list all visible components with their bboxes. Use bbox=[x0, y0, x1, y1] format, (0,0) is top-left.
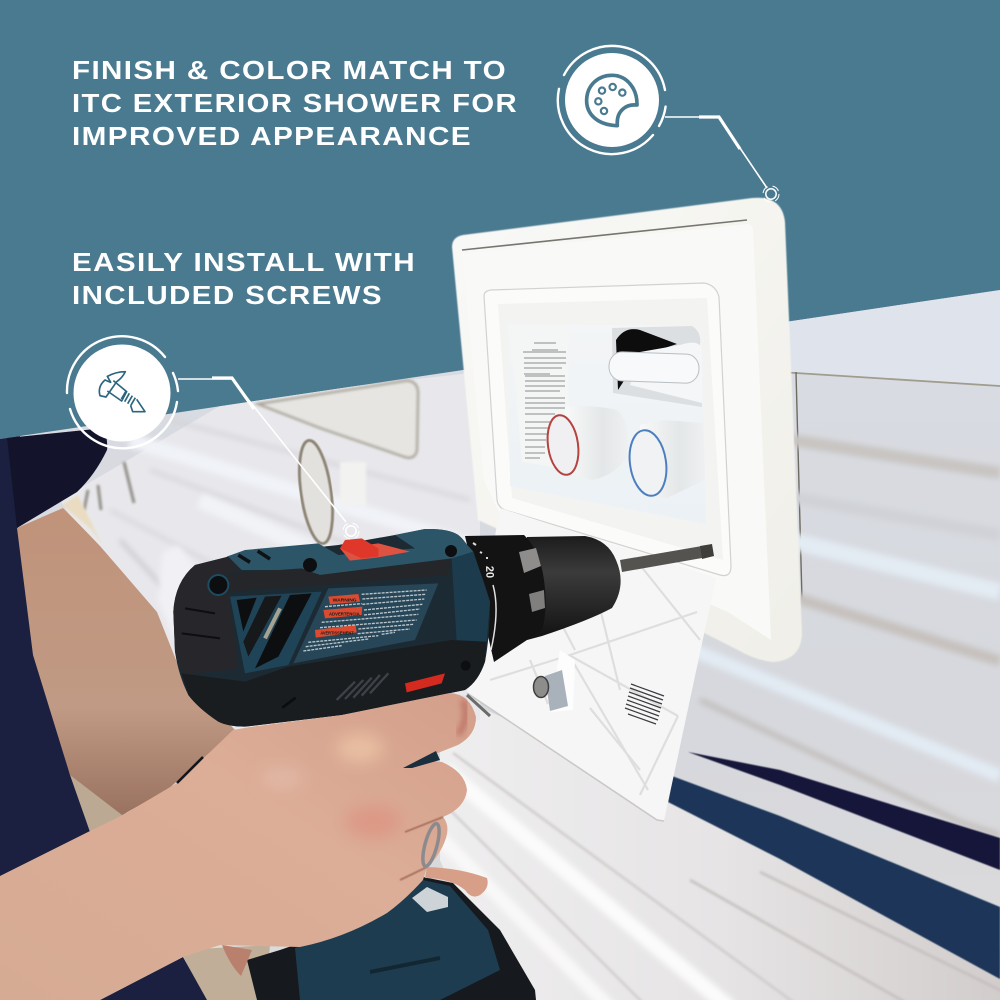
upper dark rubber bbox=[208, 558, 452, 592]
top teal housing bbox=[227, 529, 473, 575]
shirt body bbox=[0, 436, 90, 877]
warning label: WARNING bbox=[333, 598, 357, 604]
main housing bbox=[173, 529, 490, 727]
red trigger tag bbox=[405, 673, 445, 692]
ground bbox=[70, 774, 127, 832]
water pipe bbox=[630, 343, 702, 403]
heading: finish and color match: FINISH & COLOR MATCH TO bbox=[72, 57, 507, 85]
drill body bbox=[173, 529, 490, 727]
bolt and nut bbox=[534, 650, 575, 712]
door label bbox=[625, 684, 664, 724]
heading: easily install: EASILY INSTALL WITH bbox=[72, 249, 416, 277]
photo: trailer wall and person's arm bbox=[0, 280, 1000, 1000]
little finger bbox=[425, 867, 488, 897]
icon: palette badge bbox=[558, 46, 666, 154]
side teal housing bbox=[452, 552, 490, 668]
heading: easily install: INCLUDED SCREWS bbox=[72, 282, 383, 310]
blurred oval on wall bbox=[297, 438, 335, 546]
outer frame bbox=[452, 198, 802, 662]
heading: finish and color match: ITC EXTERIOR SHOWER FOR bbox=[72, 90, 518, 118]
drill bbox=[173, 529, 621, 727]
callout: screws bbox=[67, 249, 416, 539]
warm wall edge by sleeve bbox=[62, 494, 100, 541]
red forward button bbox=[340, 538, 410, 561]
vent grille bbox=[230, 592, 322, 673]
warning label: ADVERTENCIA bbox=[329, 612, 360, 618]
warning label bbox=[293, 583, 438, 663]
forearm and fingers bbox=[0, 693, 476, 1000]
lever handle bbox=[609, 351, 699, 384]
grip vents bbox=[337, 673, 388, 700]
lower wall area bbox=[440, 690, 1000, 1000]
connector line to drill bbox=[178, 378, 359, 539]
white post by drill bbox=[158, 546, 190, 625]
blurred wall bracket bbox=[84, 462, 134, 510]
ground lower bbox=[180, 945, 270, 1000]
blurred hatch on wall bbox=[258, 381, 418, 458]
shirt sleeve bbox=[7, 428, 107, 528]
heading: easily install bbox=[72, 249, 416, 310]
upper recess with hole bbox=[612, 326, 702, 407]
heading: finish and color match bbox=[72, 57, 518, 151]
thick blue trailer stripe bbox=[668, 776, 1000, 979]
collar bbox=[465, 535, 546, 662]
thin navy trailer stripe bbox=[688, 752, 1000, 870]
hot knob bbox=[544, 406, 628, 480]
hand and forearm bbox=[0, 693, 488, 1000]
chuck bbox=[527, 536, 621, 640]
warning label: AVERTISSEMENT bbox=[320, 630, 354, 635]
wrist band bbox=[177, 757, 203, 783]
lid face bbox=[462, 224, 771, 640]
icon: screw badge bbox=[67, 336, 178, 448]
top slots bbox=[238, 551, 270, 562]
heading: finish and color match: IMPROVED APPEARANCE bbox=[72, 123, 472, 151]
finger creases bbox=[400, 817, 443, 880]
shower panel bbox=[452, 198, 802, 821]
instructions placard bbox=[509, 325, 570, 470]
upper arm bbox=[17, 508, 235, 815]
left rubber bbox=[173, 557, 242, 675]
recess interior bbox=[498, 298, 723, 560]
door open below panel bbox=[467, 508, 716, 821]
lower wall siding bands bbox=[447, 753, 1000, 1000]
callout: color match bbox=[72, 46, 779, 202]
lower black grip bbox=[182, 640, 487, 727]
torque number: 20 bbox=[483, 566, 495, 578]
recess frame bbox=[484, 283, 731, 576]
siding: left side, blurred bbox=[60, 372, 480, 760]
shirt hem lower bbox=[100, 957, 207, 1000]
knuckle shading bbox=[458, 700, 466, 735]
blurred wall sticker bbox=[340, 462, 366, 506]
siding: right side bbox=[0, 280, 1000, 1000]
connector line to panel bbox=[665, 117, 779, 202]
driver bit bbox=[620, 544, 714, 572]
cold knob bbox=[626, 420, 705, 498]
battery bbox=[247, 877, 536, 1000]
hole bbox=[616, 329, 677, 390]
ring bbox=[420, 822, 442, 868]
palm heel skin bbox=[222, 945, 252, 976]
body screws bbox=[208, 545, 471, 671]
handle between fingers bbox=[403, 751, 440, 768]
